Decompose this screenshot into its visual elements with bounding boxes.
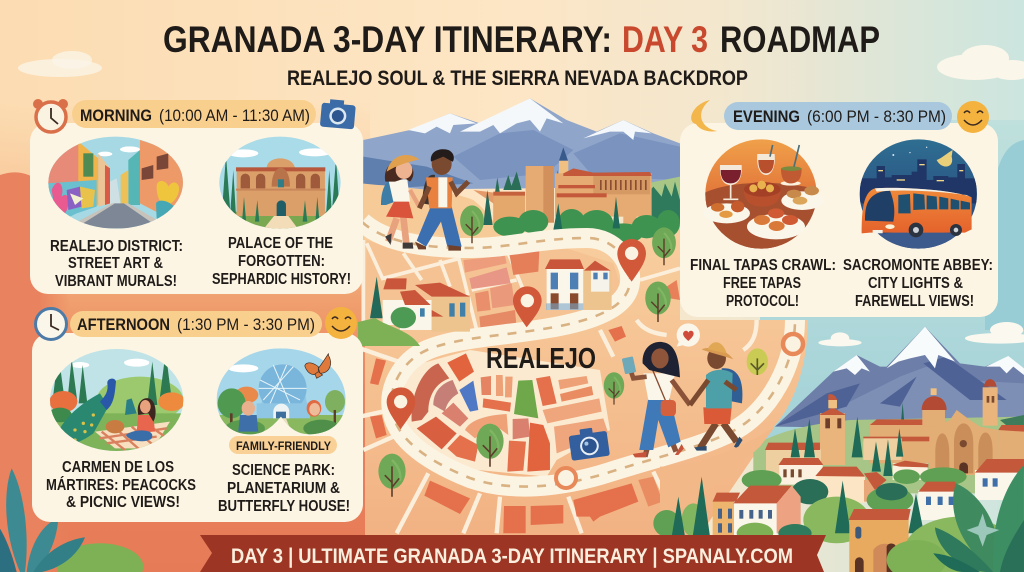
footer banner: DAY 3 | ULTIMATE GRANADA 3-DAY ITINERARY | SPANALY.COM: [231, 545, 793, 568]
text: sacromonte abbey: SACROMONTE ABBEY:: [843, 257, 993, 274]
panel: morning: [30, 99, 363, 294]
footer banner: [200, 535, 826, 572]
pin: [513, 286, 542, 327]
cathedral: [863, 379, 1024, 475]
text: realejo district: [50, 238, 183, 290]
plate front: [747, 208, 805, 239]
icon: camera on map: [568, 426, 610, 461]
sierra nevada mountains: top: [363, 98, 680, 190]
map label: REALEJO: REALEJO: [486, 343, 596, 375]
evening heading pill: (6:00 PM - 8:30 PM): [807, 107, 946, 126]
illustration: palace: [217, 135, 343, 232]
illustration: science park: [216, 348, 346, 434]
illustration: night bus: [857, 137, 980, 252]
subtitle: REALEJO SOUL & THE SIERRA NEVADA BACKDROP: [287, 67, 748, 90]
text: science park: BUTTERFLY HOUSE!: [218, 498, 350, 515]
morning heading pill: (10:00 AM - 11:30 AM): [159, 106, 310, 125]
text: realejo district: REALEJO DISTRICT:: [50, 238, 183, 255]
travellers: top couple: [381, 149, 468, 251]
text: carmen de los martires: CARMEN DE LOS: [62, 459, 174, 476]
text: final tapas crawl: PROTOCOL!: [726, 293, 799, 310]
woman with phone: [622, 342, 690, 457]
cazuela: [744, 181, 781, 207]
heart bubble: [677, 323, 700, 347]
house: ochre with arch: [849, 509, 911, 572]
icon: butterfly: [305, 354, 331, 378]
text: final tapas crawl: FINAL TAPAS CRAWL:: [690, 257, 836, 274]
text: realejo district: VIBRANT MURALS!: [55, 273, 177, 290]
trees: [378, 205, 676, 497]
cypress trees: [791, 417, 903, 476]
mountains: [775, 327, 1024, 430]
icon: clock: [36, 308, 66, 340]
alhambra palace on the hill: [483, 147, 680, 243]
title: ROADMAP: [720, 19, 880, 60]
fields: [753, 417, 1024, 493]
text: carmen de los martires: & PICNIC VIEWS!: [66, 494, 180, 511]
panel: afternoon: [32, 307, 363, 522]
title: DAY 3: [622, 19, 708, 60]
location pins: [387, 239, 803, 488]
travellers: bottom couple: [622, 323, 743, 457]
text: palace of the forgotten: FORGOTTEN:: [238, 253, 325, 270]
text: sacromonte abbey: CITY LIGHTS &: [868, 275, 963, 292]
house: white bottom: [835, 481, 960, 533]
landscape bottom right: mountains and old town: [653, 322, 1024, 572]
hills and gardens behind the map: [362, 177, 680, 247]
foliage bottom right: [933, 465, 1024, 572]
text: carmen de los martires: MÁRTIRES: PEACOCKS: [46, 475, 196, 494]
yellow bush: [747, 348, 768, 375]
panel: evening: [680, 100, 998, 317]
icon: crescent moon: [691, 100, 717, 131]
morning heading pill: MORNING: [80, 106, 152, 125]
bowl: [781, 145, 802, 186]
icon: alarm clock: [33, 99, 68, 132]
route marker: [783, 334, 803, 354]
evening heading pill: [724, 102, 952, 130]
cocktail glass: [757, 145, 775, 175]
route marker: [556, 468, 576, 488]
icon: camera: [320, 99, 356, 129]
main dashed route: [362, 222, 795, 487]
district road network, north: [363, 240, 680, 330]
family-friendly badge: FAMILY-FRIENDLY: [236, 439, 331, 453]
houses on the map: [370, 259, 612, 332]
clouds: [818, 322, 1024, 346]
pin: [617, 239, 646, 282]
illustration: street art: [47, 135, 185, 230]
foliage bottom left: [0, 468, 143, 572]
wine glass: [720, 165, 742, 199]
text: palace of the forgotten: PALACE OF THE: [228, 235, 333, 252]
afternoon heading pill: AFTERNOON: [77, 315, 170, 334]
houses: terracotta group: [370, 277, 470, 332]
bus: [862, 188, 972, 237]
clouds: top right: [18, 45, 1024, 80]
map land: [365, 225, 808, 535]
text: carmen de los martires: [46, 459, 196, 511]
pin: [387, 387, 415, 429]
evening heading pill: EVENING: [733, 107, 800, 126]
text: realejo district: STREET ART &: [68, 255, 163, 272]
text: sacromonte abbey: [843, 257, 993, 310]
text: palace of the forgotten: [212, 235, 351, 288]
text: science park: SCIENCE PARK:: [232, 462, 335, 479]
garden: [653, 467, 967, 543]
plate right: [781, 186, 823, 210]
afternoon heading pill: (1:30 PM - 3:30 PM): [177, 315, 315, 334]
afternoon heading pill: [70, 311, 322, 337]
district road network, south: [360, 320, 757, 533]
text: science park: PLANETARIUM &: [227, 480, 340, 497]
plate left: [703, 201, 750, 223]
houses: [765, 394, 1024, 503]
house: front left: [672, 477, 812, 544]
text: sacromonte abbey: FAREWELL VIEWS!: [855, 293, 974, 310]
text: final tapas crawl: FREE TAPAS: [723, 275, 801, 292]
realejo street map: [360, 240, 757, 533]
text: science park: [218, 462, 350, 515]
text: final tapas crawl: [690, 257, 836, 310]
icon: smiley: [957, 101, 989, 133]
illustration: tapas: [703, 138, 823, 252]
illustration: carmen de los martires: [50, 349, 184, 451]
morning heading pill: [72, 100, 316, 128]
text: palace of the forgotten: SEPHARDIC HISTORY!: [212, 271, 351, 288]
house: blue balconies: [545, 259, 612, 310]
green bush: bottom of houses: [358, 318, 420, 346]
man with backpack: [690, 342, 743, 451]
icon: smiley: [325, 307, 357, 339]
title: GRANADA 3-DAY ITINERARY:: [163, 19, 612, 60]
